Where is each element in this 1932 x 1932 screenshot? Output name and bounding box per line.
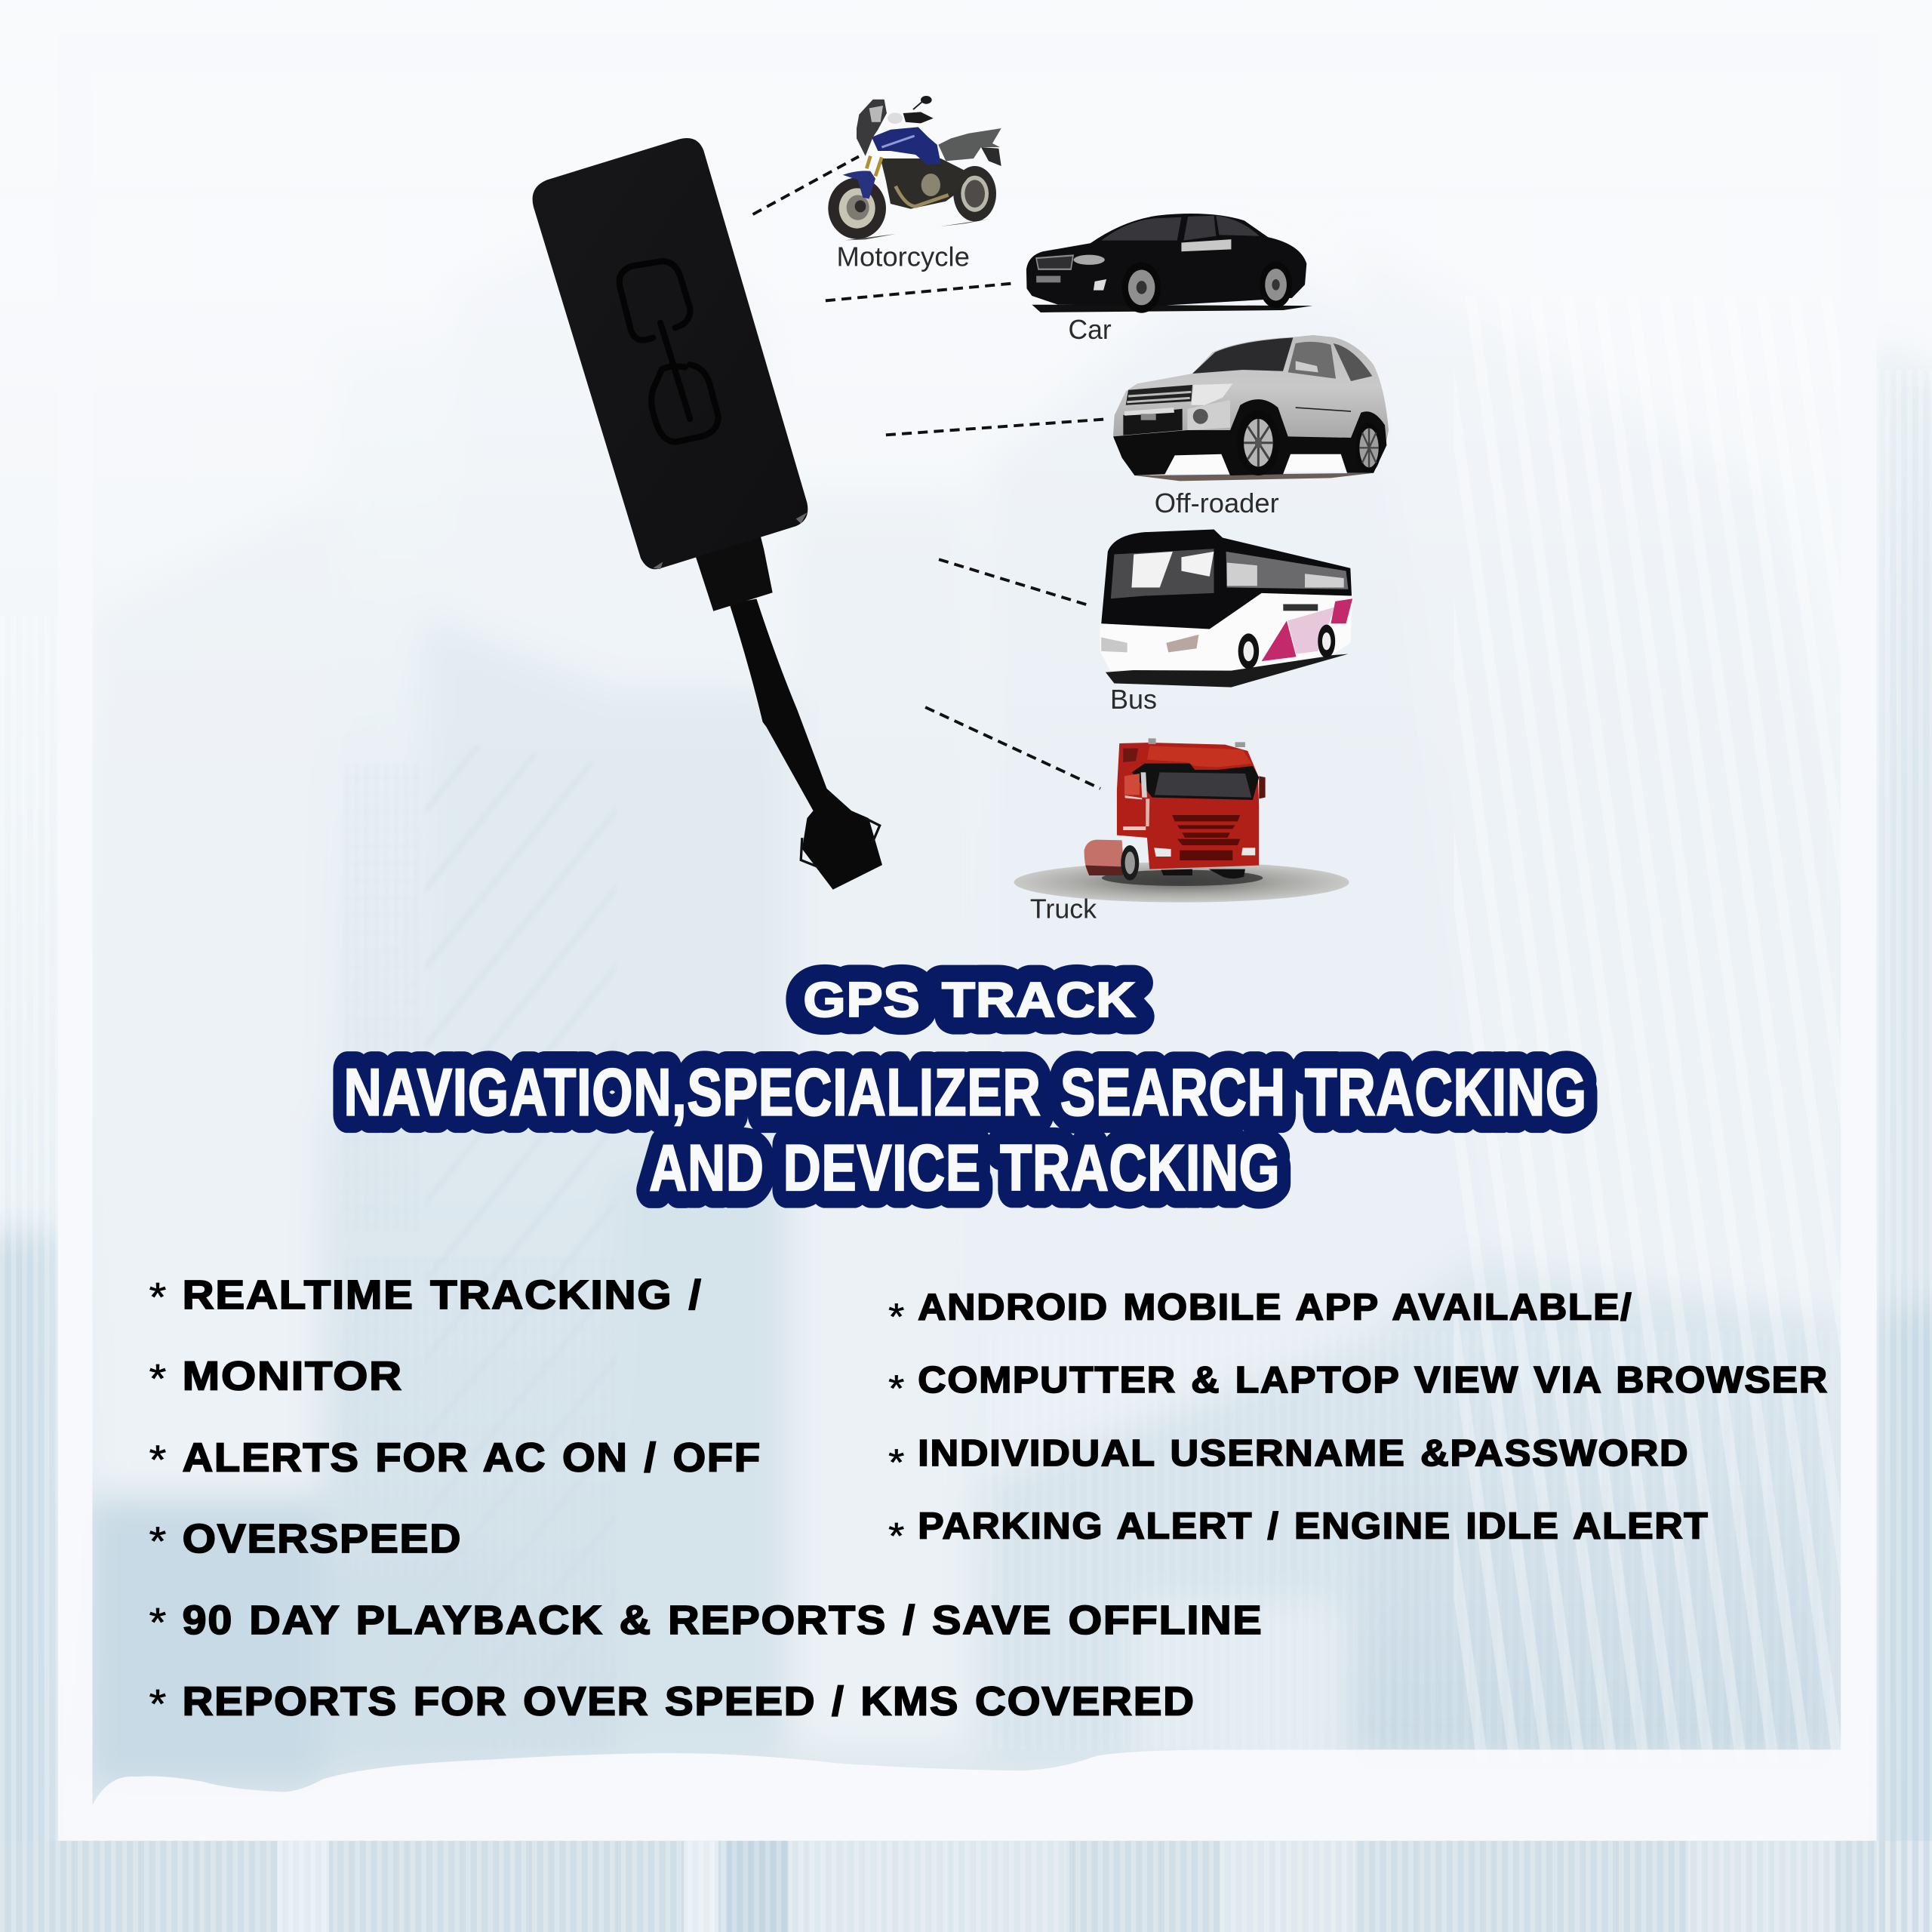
item: alerts: ALERTS FOR AC ON / OFF bbox=[183, 1435, 761, 1480]
item: username: INDIVIDUAL USERNAME &PASSWORD bbox=[918, 1433, 1689, 1474]
item: computer view: COMPUTTER & LAPTOP VIEW VIA BROWSER bbox=[918, 1360, 1829, 1401]
heading: navigation subtitle bbox=[344, 1055, 1587, 1204]
heading: navigation subtitle: NAVIGATION,SPECIALIZER SEARCH TRACKING bbox=[344, 1055, 1587, 1130]
GPS tracker device bbox=[533, 138, 882, 890]
item: computer view: * bbox=[888, 1368, 904, 1409]
item: realtime tracking: REALTIME TRACKING / bbox=[183, 1272, 703, 1318]
heading: navigation subtitle: NAVIGATION,SPECIALIZER SEARCH TRACKING bbox=[344, 1055, 1587, 1130]
connector clip marks bbox=[801, 818, 880, 867]
link icon bbox=[620, 261, 718, 441]
dashed connectors bbox=[753, 156, 1109, 789]
strain relief bbox=[695, 535, 773, 611]
vehicle: off-roader bbox=[1113, 335, 1389, 481]
item: reports: * bbox=[149, 1681, 166, 1727]
device corner highlights bbox=[653, 512, 807, 569]
item: android app: * bbox=[888, 1297, 904, 1338]
feature list: left column bbox=[149, 1272, 1263, 1727]
label: Truck: Truck bbox=[1030, 893, 1097, 924]
item: android app: ANDROID MOBILE APP AVAILABLE/ bbox=[918, 1287, 1632, 1328]
heading: GPS TRACK: GPS TRACK bbox=[803, 972, 1136, 1027]
label: Bus: Bus bbox=[1110, 684, 1157, 715]
vehicle: car bbox=[1026, 214, 1312, 313]
vehicle: truck bbox=[1014, 738, 1349, 903]
device body bbox=[533, 138, 808, 569]
item: playback: * bbox=[149, 1600, 166, 1645]
device cable and connector bbox=[730, 598, 882, 890]
item: parking alert: PARKING ALERT / ENGINE IDLE ALERT bbox=[918, 1506, 1709, 1547]
heading: GPS TRACK: GPS TRACK bbox=[803, 972, 1136, 1027]
item: overspeed: OVERSPEED bbox=[183, 1516, 462, 1561]
bottom strip of towers bbox=[0, 1841, 1932, 1932]
vehicle: motorcycle bbox=[828, 96, 1001, 240]
item: playback: 90 DAY PLAYBACK & REPORTS / SAVE OFFLINE bbox=[183, 1598, 1263, 1643]
heading: navigation subtitle: AND DEVICE TRACKING bbox=[649, 1132, 1280, 1204]
item: overspeed: * bbox=[149, 1518, 166, 1564]
heading: navigation subtitle: AND DEVICE TRACKING bbox=[649, 1132, 1280, 1204]
item: realtime tracking: * bbox=[149, 1275, 166, 1320]
item: parking alert: * bbox=[888, 1516, 904, 1557]
vehicle: bus bbox=[1100, 530, 1352, 688]
item: username: * bbox=[888, 1442, 904, 1483]
label: Motorcycle: Motorcycle bbox=[837, 242, 970, 272]
item: monitor: * bbox=[149, 1356, 166, 1401]
item: reports: REPORTS FOR OVER SPEED / KMS COVERED bbox=[183, 1679, 1195, 1724]
feature list: right column bbox=[888, 1287, 1829, 1557]
label: Car: Car bbox=[1069, 314, 1112, 345]
item: monitor: MONITOR bbox=[183, 1354, 403, 1399]
item: alerts: * bbox=[149, 1438, 166, 1483]
label: Off-roader: Off-roader bbox=[1155, 488, 1279, 518]
